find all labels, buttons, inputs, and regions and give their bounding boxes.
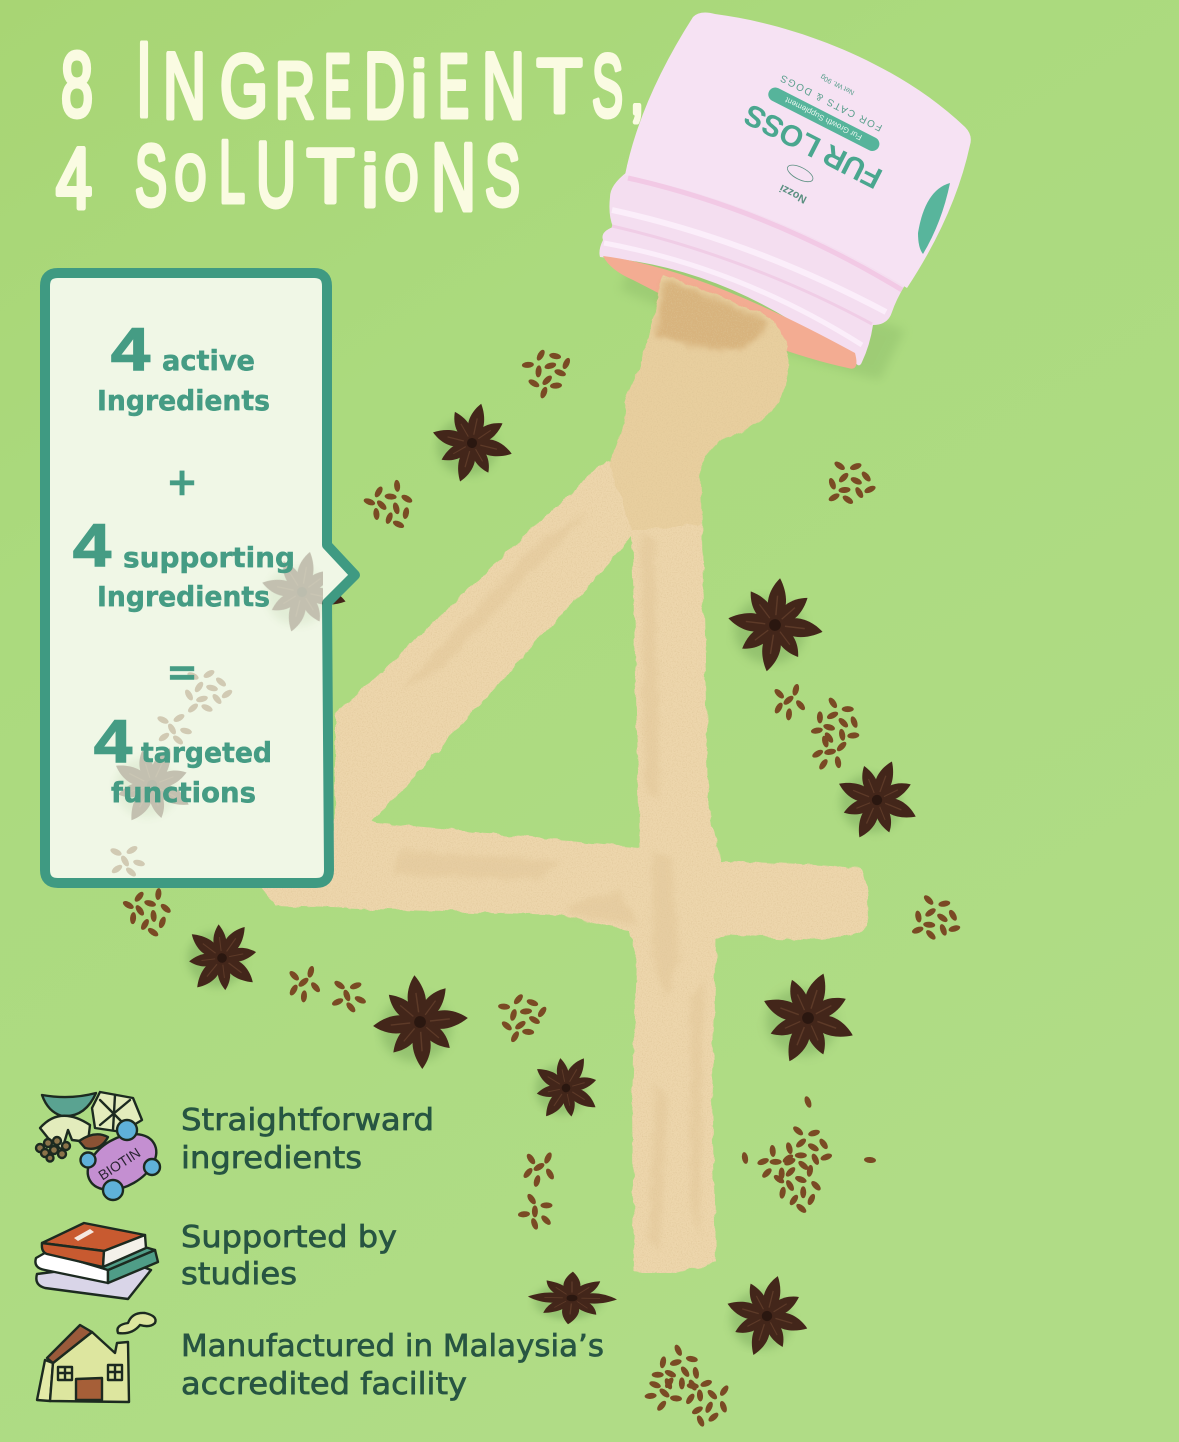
4 supporting ingredients: Ingredients: [97, 580, 270, 613]
faded seeds and anise seen through the card: [110, 552, 323, 876]
jar label: FUR LOSS: [739, 97, 887, 195]
star anise and flax seeds scattered around the powder: [119, 338, 969, 1432]
plus sign: +: [166, 460, 198, 504]
icon: stack of books: [35, 1223, 158, 1299]
text: straightforward ingredients: [181, 1103, 434, 1176]
jar round badge: [918, 183, 950, 254]
title: S: [485, 128, 520, 224]
title: [56, 21, 644, 231]
4 targeted functions: targeted: [141, 736, 272, 769]
4 supporting ingredients: 4: [73, 512, 112, 579]
jar opening: [603, 256, 856, 369]
text: manufactured in Malaysia's accredited facility: accredited facility: [181, 1367, 467, 1402]
jar label: Net Wt. 90g: [820, 73, 856, 96]
title: I: [136, 21, 152, 139]
title: O: [175, 144, 206, 213]
title: D: [364, 33, 405, 138]
4 active ingredients: active: [162, 344, 255, 377]
text: supported by studies: studies: [181, 1257, 297, 1292]
text: manufactured in Malaysia's accredited facility: [181, 1329, 604, 1402]
title: i: [411, 45, 427, 133]
jar label: Nozzi: [778, 182, 809, 205]
jar label: [720, 50, 912, 231]
4 active ingredients: Ingredients: [97, 384, 270, 417]
title: E: [438, 37, 469, 137]
title: N: [431, 124, 476, 231]
text: manufactured in Malaysia's accredited facility: Manufactured in Malaysia’s: [181, 1329, 604, 1364]
4 targeted functions: [94, 708, 272, 809]
4 supporting ingredients: [73, 512, 295, 613]
title: 4: [56, 131, 92, 227]
4 targeted functions: 4: [94, 708, 133, 775]
product jar: [599, 13, 971, 380]
text: supported by studies: [181, 1220, 397, 1292]
4 supporting ingredients: supporting: [123, 541, 295, 574]
powder shaped as a number 4: [262, 460, 868, 1273]
title: ,: [630, 50, 644, 128]
title: L: [219, 122, 245, 221]
text: straightforward ingredients: ingredients: [181, 1141, 362, 1176]
icon: botanicals and biotin: [36, 1092, 166, 1201]
title: O: [385, 144, 418, 213]
jar label: FOR CATS & DOGS: [778, 71, 884, 133]
title: G: [220, 36, 268, 135]
title: i: [362, 142, 378, 222]
title: N: [163, 33, 206, 138]
equals sign: =: [166, 650, 198, 694]
jar label: Fur Growth Supplement: [783, 95, 864, 142]
4 active ingredients: [97, 316, 270, 417]
icon: botanicals and biotin: BIOTIN: [95, 1144, 143, 1183]
panel: ingredient equation card: [45, 273, 355, 883]
title: E: [324, 37, 351, 137]
jar thread and neck: [599, 165, 905, 365]
powder pouring from the jar mouth: [608, 275, 790, 530]
title: U: [256, 124, 296, 226]
title: S: [592, 36, 623, 135]
text: straightforward ingredients: Straightforward: [181, 1103, 434, 1138]
title: T: [307, 134, 354, 219]
title: 8: [61, 34, 93, 136]
text: supported by studies: Supported by: [181, 1220, 397, 1255]
title: R: [275, 46, 315, 135]
4 active ingredients: 4: [111, 316, 151, 383]
title: N: [482, 33, 525, 138]
4 targeted functions: functions: [111, 776, 256, 809]
jar body: [625, 13, 971, 288]
title: S: [135, 128, 167, 224]
icon: factory house: [37, 1313, 156, 1402]
title: T: [537, 44, 582, 129]
